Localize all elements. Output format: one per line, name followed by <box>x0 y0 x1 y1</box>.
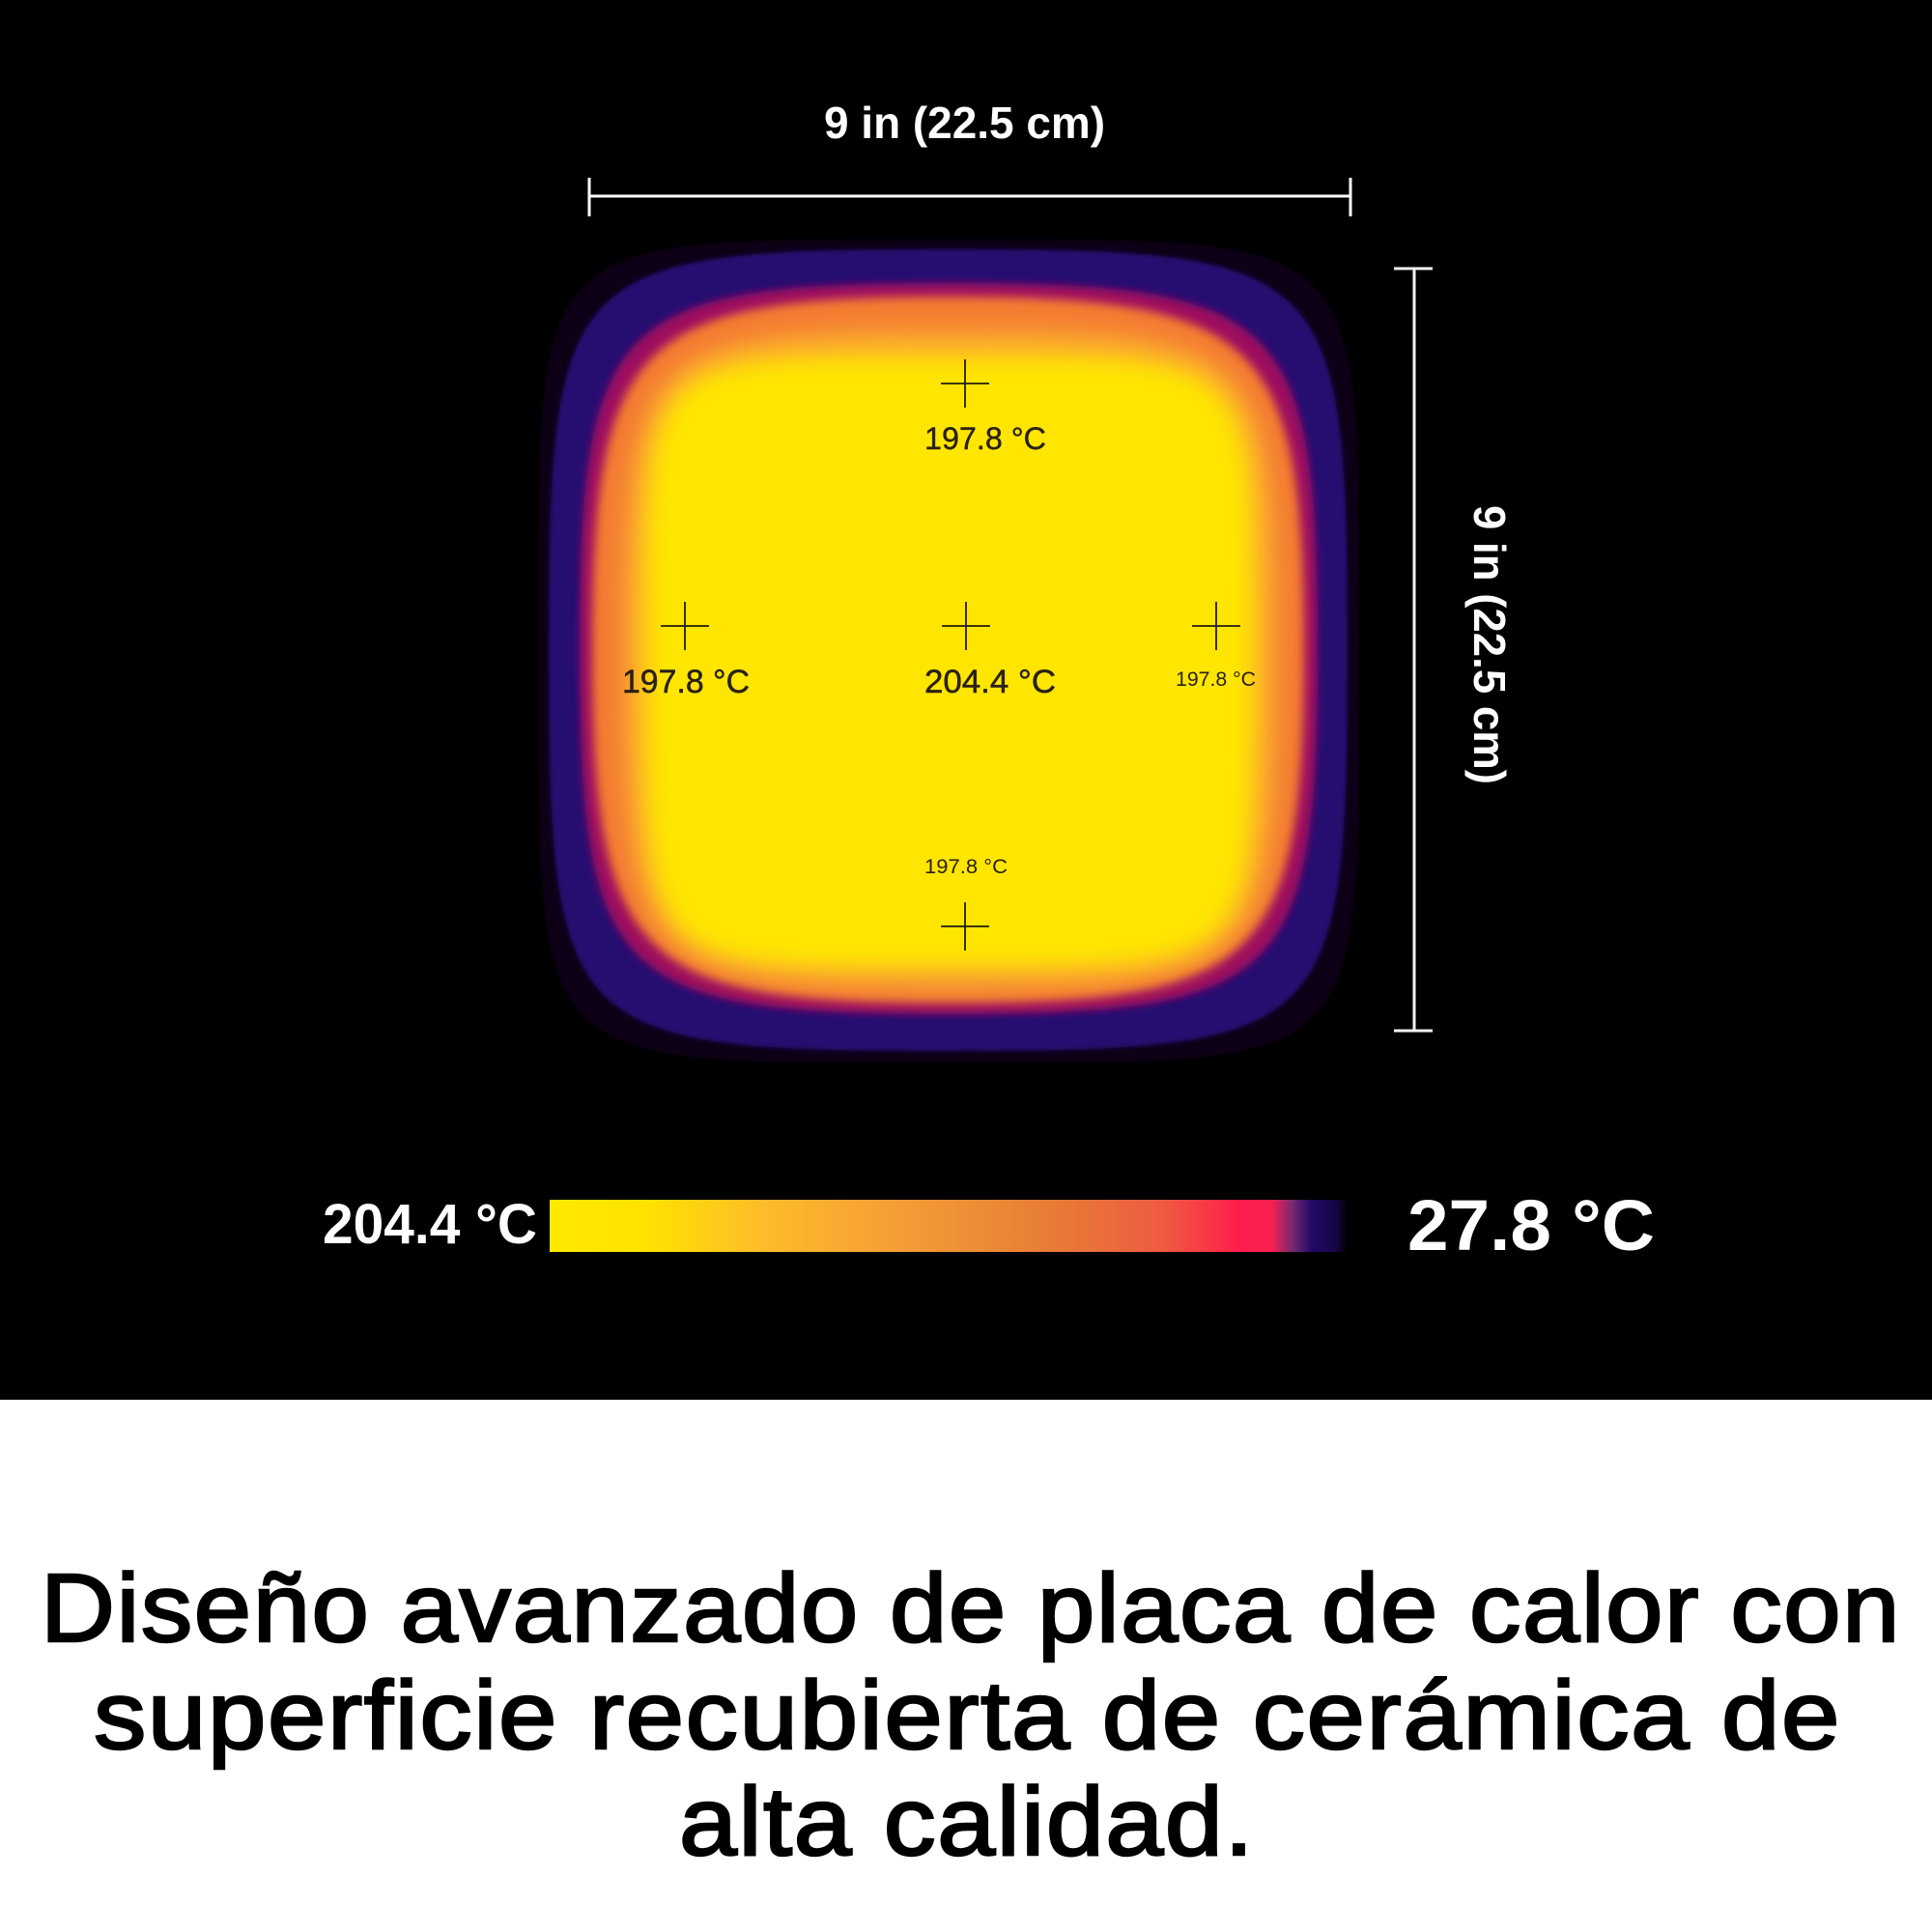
measurement point: center: 204.4 °C <box>924 664 1056 700</box>
scale minimum label: 27.8 °C <box>1407 1185 1655 1265</box>
width dimension arrow <box>589 178 1350 216</box>
measurement point: top <box>924 359 1046 456</box>
measurement point: center <box>924 602 1056 700</box>
measurement point: bottom <box>924 856 1008 951</box>
measurement point: right <box>1176 602 1256 691</box>
height dimension arrow <box>1394 269 1433 1031</box>
measurement point: bottom: 197.8 °C <box>924 856 1008 878</box>
title: Diseño avanzado de placa de calor con <box>41 1554 1901 1662</box>
title <box>41 1554 1901 1876</box>
thermal map of heat plate <box>538 240 1359 1063</box>
panel: black background <box>0 0 1932 1400</box>
title: alta calidad. <box>679 1768 1255 1876</box>
measurement point: left <box>622 602 750 700</box>
scale maximum label: 204.4 °C <box>323 1193 537 1256</box>
temperature scale bar <box>550 1200 1348 1252</box>
panel: white caption area <box>0 1400 1932 1932</box>
width dimension label: 9 in (22.5 cm) <box>824 98 1105 148</box>
measurement point: right: 197.8 °C <box>1176 668 1256 691</box>
measurement point: top: 197.8 °C <box>924 421 1046 456</box>
height dimension label: 9 in (22.5 cm) <box>1464 505 1515 784</box>
title: superficie recubierta de cerámica de <box>94 1662 1841 1770</box>
measurement point: left: 197.8 °C <box>622 664 750 700</box>
